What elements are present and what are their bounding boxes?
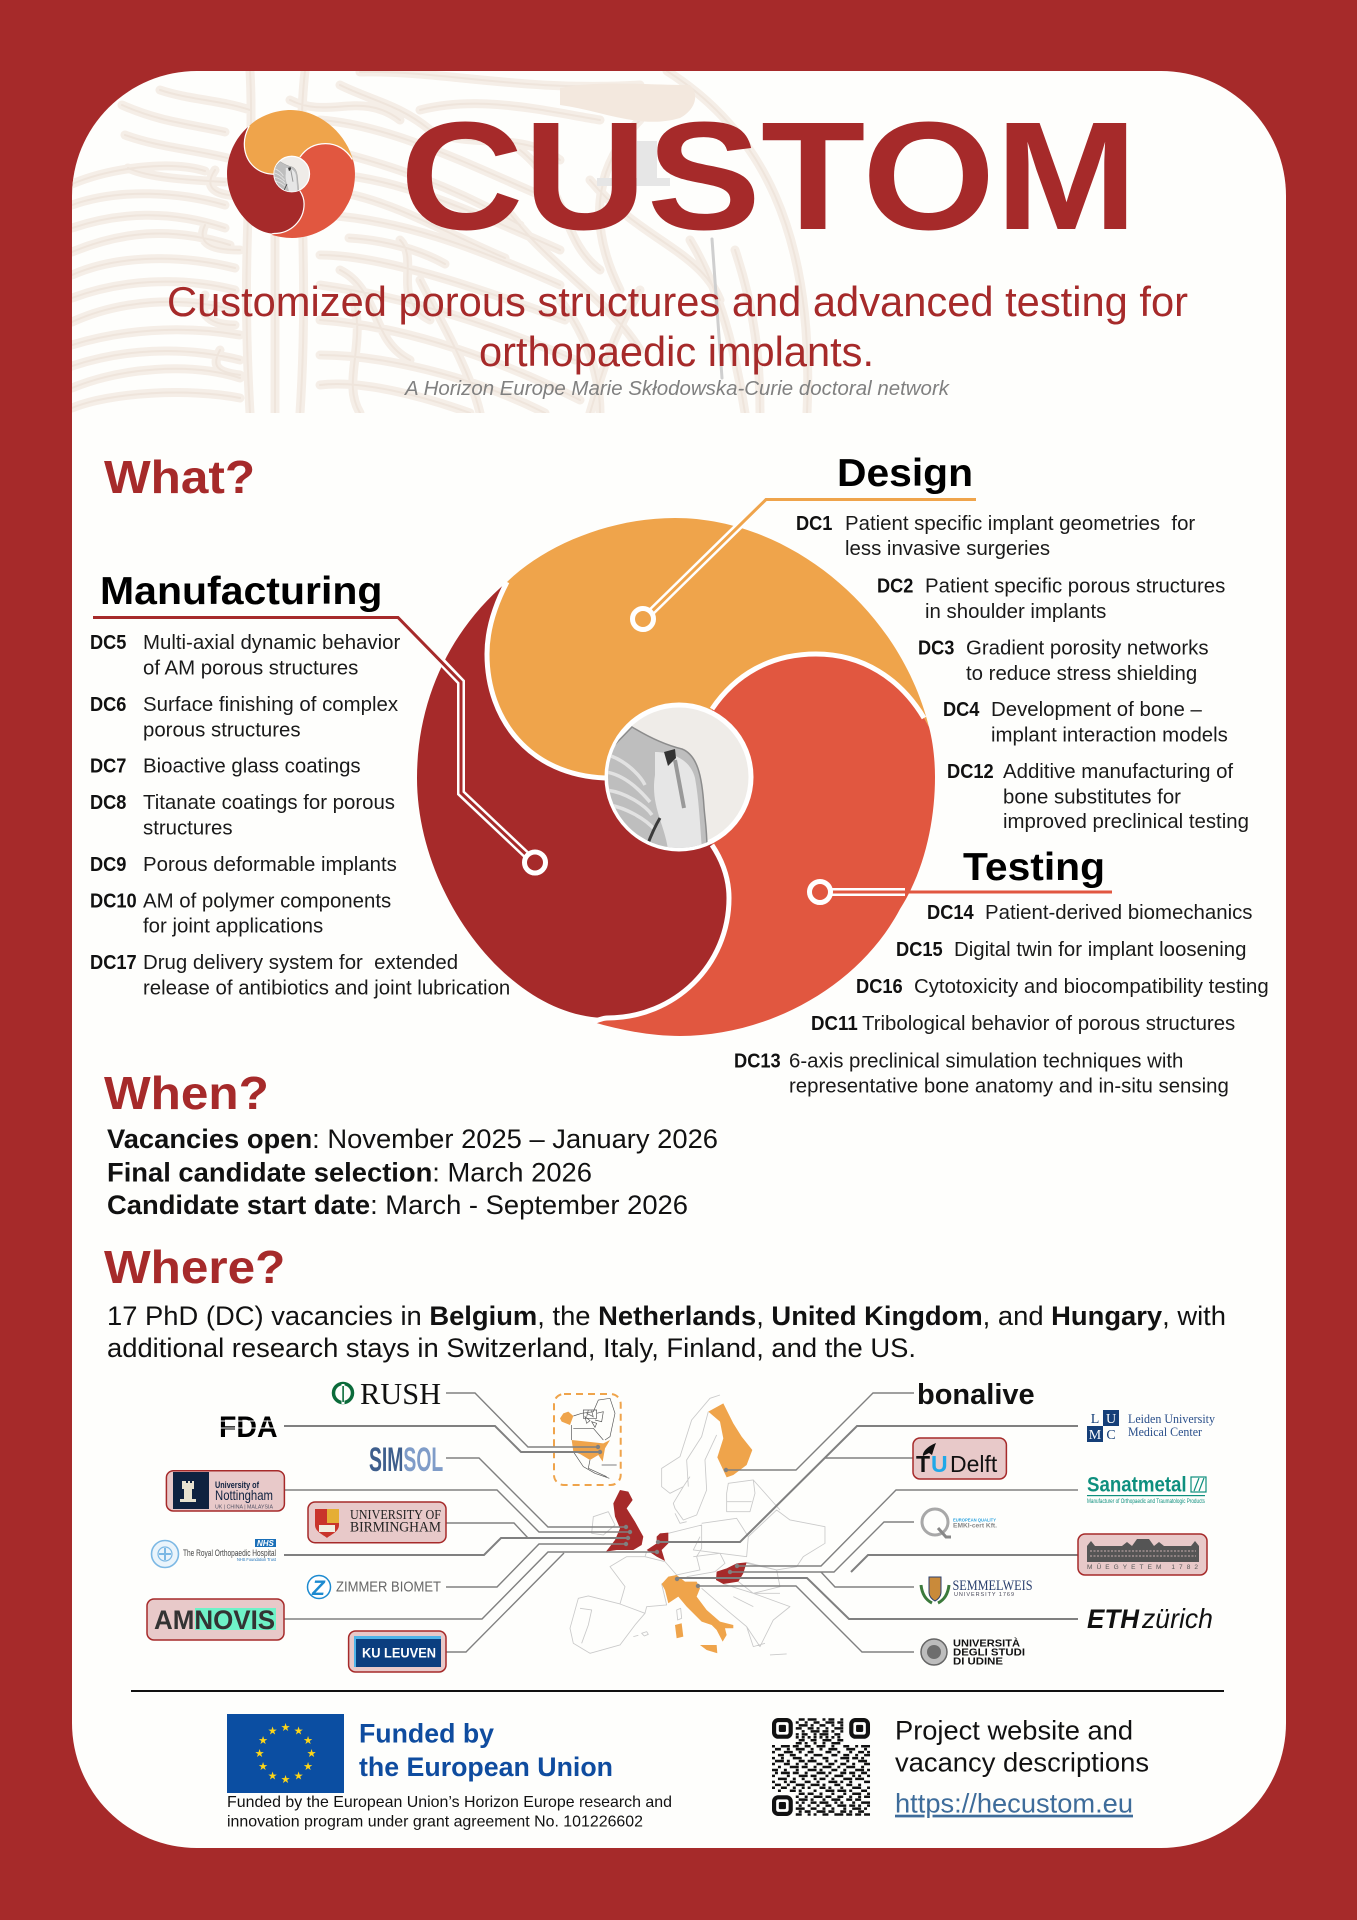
design list: DC2 — [877, 576, 913, 598]
subtitle: orthopaedic implants. — [479, 328, 874, 375]
europe outlines — [570, 1395, 825, 1655]
logo: Sanatmetal: Sanatmetal — [1087, 1474, 1187, 1497]
design list: in shoulder implants — [925, 601, 1106, 623]
callout line: design — [632, 500, 976, 630]
logo: TU Delft: Delft — [950, 1451, 998, 1477]
heading: Testing: Testing — [963, 846, 1105, 889]
manufacturing list: DC10 — [90, 890, 137, 912]
testing list: Cytotoxicity and biocompatibility testing — [914, 976, 1269, 998]
grant statement: innovation program under grant agreement No. 101226602 — [227, 1814, 643, 1831]
manufacturing list — [90, 632, 510, 1000]
logo: Zimmer Biomet: Z — [311, 1577, 326, 1600]
manufacturing list: DC5 — [90, 632, 126, 654]
logo: EMKI-cert — [922, 1509, 997, 1537]
logo: Muegyetem — [1078, 1534, 1207, 1575]
logo: Leiden University Medical Center: C — [1106, 1428, 1116, 1443]
logo: EMKI-cert: EUROPEAN QUALITY — [953, 1518, 996, 1523]
funded by EU text: the European Union — [359, 1752, 613, 1782]
background anatomy illustration — [72, 71, 808, 413]
logo: Sanatmetal — [1087, 1474, 1206, 1505]
testing list: Digital twin for implant loosening — [954, 939, 1246, 961]
logo: University of Udine: DEGLI STUDI — [953, 1648, 1025, 1659]
funded by EU text — [359, 1719, 613, 1782]
logo: University of Udine — [921, 1637, 1025, 1668]
manufacturing list: structures — [143, 818, 233, 840]
logo: KU Leuven — [349, 1631, 446, 1672]
leader lines — [284, 1393, 1078, 1652]
project website text: vacancy descriptions — [895, 1748, 1149, 1778]
subtitle: Customized porous structures and advanced testing for — [167, 278, 1188, 325]
testing list: DC13 — [734, 1050, 781, 1072]
map of partner countries — [560, 1395, 825, 1655]
manufacturing list: of AM porous structures — [143, 658, 358, 680]
design list: Gradient porosity networks — [966, 638, 1209, 660]
manufacturing list: DC8 — [90, 792, 126, 814]
logo: University of Birmingham: UNIVERSITY OF — [350, 1507, 441, 1522]
logo: ETH Zurich — [1087, 1603, 1213, 1634]
tagline: A Horizon Europe Marie Skłodowska-Curie doctoral network — [403, 377, 951, 400]
EU flag: ★ — [281, 1774, 291, 1786]
centre hub with shoulder image — [600, 705, 751, 850]
manufacturing list: Titanate coatings for porous — [143, 792, 395, 814]
logo: AM Novis — [147, 1599, 284, 1640]
highlighted countries — [560, 1403, 752, 1653]
logo: Royal Orthopaedic Hospital — [152, 1539, 277, 1568]
design list: Patient specific porous structures — [925, 576, 1225, 598]
logo: ETH Zurich: ETH — [1087, 1604, 1139, 1634]
manufacturing list: Bioactive glass coatings — [143, 756, 361, 778]
logo: Sanatmetal: Manufacturer of Orthopaedic and Traumatologic Products — [1087, 1499, 1205, 1505]
grant statement: Funded by the European Union’s Horizon Europe research and — [227, 1794, 672, 1811]
heading: Design: Design — [837, 452, 973, 495]
design list: Additive manufacturing of — [1003, 761, 1233, 783]
design list: improved preclinical testing — [1003, 811, 1249, 833]
logo: University of Birmingham — [308, 1502, 446, 1543]
manufacturing list: AM of polymer components — [143, 890, 391, 912]
design list: Development of bone – — [991, 699, 1203, 721]
logo: Leiden University Medical Center: Medical Center — [1128, 1425, 1203, 1439]
heading: Testing — [810, 846, 1112, 902]
design list — [796, 513, 1249, 833]
logo: Leiden University Medical Center: M — [1089, 1428, 1102, 1443]
logo: University of Birmingham: BIRMINGHAM — [350, 1520, 441, 1536]
logo: Zimmer Biomet: ZIMMER BIOMET — [336, 1580, 441, 1596]
logo: Royal Orthopaedic Hospital: NHS Foundation Trust — [237, 1557, 277, 1562]
when text: Final candidate selection: March 2026 — [107, 1158, 592, 1188]
EU flag: ★ — [268, 1726, 278, 1738]
manufacturing list: porous structures — [143, 719, 301, 741]
logo: TU Delft — [913, 1438, 1006, 1479]
design list: to reduce stress shielding — [966, 663, 1197, 685]
title: CUSTOM — [400, 91, 1138, 262]
when text: Vacancies open: November 2025 – January 2026 — [107, 1124, 718, 1154]
logo: University of Udine: UNIVERSITÀ — [953, 1637, 1020, 1650]
logo: Zimmer Biomet — [308, 1576, 441, 1600]
grant statement — [227, 1794, 672, 1831]
heading: Design — [632, 452, 976, 630]
logo: University of Nottingham: UK | CHINA | MALAYSIA — [215, 1505, 273, 1511]
heading: When?: When? — [104, 1069, 269, 1120]
segment: manufacturing — [417, 582, 729, 1018]
funded by EU text: Funded by — [359, 1719, 494, 1749]
testing list: 6-axis preclinical simulation techniques with — [789, 1050, 1183, 1072]
logo: Royal Orthopaedic Hospital: NHS — [257, 1539, 275, 1548]
EU flag: ★ — [303, 1761, 313, 1773]
project website text: Project website and — [895, 1715, 1133, 1745]
logo: University of Udine: DI UDINE — [953, 1656, 1003, 1668]
design list: DC3 — [918, 638, 954, 660]
north america outline — [572, 1398, 617, 1478]
EU flag: ★ — [281, 1722, 291, 1734]
logo: AM Novis: AMNOVIS — [154, 1605, 275, 1635]
logo: Semmelweis: UNIVERSITY 1769 — [954, 1592, 1014, 1598]
testing list: DC16 — [856, 976, 903, 998]
logo: Muegyetem: MŰEGYETEM 1782 — [1087, 1562, 1198, 1571]
logo: TU Delft: U — [931, 1451, 948, 1477]
testing list: Patient-derived biomechanics — [985, 902, 1252, 924]
logo: Royal Orthopaedic Hospital: The Royal Orthopaedic Hospital — [183, 1548, 276, 1559]
project website text — [895, 1715, 1149, 1819]
segment: design — [487, 518, 929, 778]
logo: ETH Zurich: zürich — [1141, 1603, 1213, 1634]
EU flag: ★ — [268, 1770, 278, 1782]
subtitle — [167, 278, 1188, 375]
logo: Leiden University Medical Center: U — [1106, 1412, 1116, 1427]
logo: SimSol: SIMSOL — [369, 1440, 443, 1478]
QR code — [772, 1719, 870, 1815]
design list: DC4 — [943, 699, 980, 721]
logo: Leiden University Medical Center — [1087, 1410, 1216, 1443]
logo: Rush: RUSH — [360, 1377, 441, 1411]
callout line: testing — [810, 882, 1112, 902]
manufacturing list: DC6 — [90, 694, 126, 716]
manufacturing list: Surface finishing of complex — [143, 694, 398, 716]
where text: 17 PhD (DC) vacancies in Belgium, the Netherlands, United Kingdom, and Hungary, with — [107, 1301, 1226, 1331]
logo: University of Nottingham: University of — [215, 1480, 260, 1491]
EU flag: ★ — [258, 1735, 268, 1747]
design list: DC12 — [947, 761, 994, 783]
logo: Semmelweis — [921, 1577, 1032, 1603]
manufacturing list: DC7 — [90, 756, 126, 778]
inset frame: north america — [554, 1394, 621, 1485]
EU flag: ★ — [294, 1726, 304, 1738]
testing list: DC11 — [811, 1013, 858, 1035]
design list: less invasive surgeries — [845, 538, 1050, 560]
design list: DC1 — [796, 513, 832, 535]
logo: Leiden University Medical Center: L — [1091, 1412, 1099, 1427]
heading: Manufacturing — [93, 570, 546, 873]
logo: spiral mark — [227, 110, 355, 238]
logo: University of Nottingham: Nottingham — [215, 1487, 273, 1503]
EU flag: ★ — [294, 1770, 304, 1782]
manufacturing list: Drug delivery system for extended — [143, 952, 458, 974]
testing list: Tribological behavior of porous structures — [862, 1013, 1235, 1035]
testing list — [734, 902, 1269, 1098]
spiral diagram — [417, 518, 935, 1036]
testing list: representative bone anatomy and in-situ sensing — [789, 1076, 1229, 1098]
where text: additional research stays in Switzerland, Italy, Finland, and the US. — [107, 1333, 916, 1363]
EU flag: ★ — [303, 1735, 313, 1747]
design list: bone substitutes for — [1003, 786, 1181, 808]
manufacturing list: DC9 — [90, 854, 126, 876]
when text — [107, 1124, 718, 1220]
manufacturing list: DC17 — [90, 952, 137, 974]
logo: KU Leuven: KU LEUVEN — [362, 1645, 436, 1661]
when text: Candidate start date: March - September 2026 — [107, 1190, 688, 1220]
logo: Leiden University Medical Center: Leiden University — [1128, 1412, 1216, 1426]
segment: testing — [593, 654, 935, 1036]
project website text: https://hecustom.eu — [895, 1789, 1133, 1819]
design list: implant interaction models — [991, 724, 1228, 746]
where text — [107, 1301, 1226, 1363]
EU flag: ★ — [255, 1748, 265, 1760]
testing list: DC15 — [896, 939, 943, 961]
manufacturing list: Porous deformable implants — [143, 854, 397, 876]
EU flag: ★ — [307, 1748, 317, 1760]
manufacturing list: release of antibiotics and joint lubrication — [143, 978, 510, 1000]
EU flag — [227, 1714, 344, 1793]
logo: FDA: FDA — [219, 1411, 278, 1444]
logo: TU Delft: T — [916, 1451, 930, 1477]
heading: Manufacturing: Manufacturing — [100, 570, 382, 613]
logo: bonalive: bonalive — [917, 1379, 1035, 1411]
manufacturing list: for joint applications — [143, 916, 323, 938]
testing list: DC14 — [927, 902, 974, 924]
design list: Patient specific implant geometries for — [845, 513, 1195, 535]
EU flag: ★ — [258, 1761, 268, 1773]
callout line: manufacturing — [93, 618, 546, 873]
logo: EMKI-cert: EMKI-cert Kft. — [953, 1523, 997, 1530]
logo: Semmelweis: SEMMELWEIS — [952, 1578, 1032, 1594]
logo: University of Nottingham — [166, 1471, 284, 1511]
heading: Where?: Where? — [104, 1243, 285, 1294]
manufacturing list: Multi-axial dynamic behavior — [143, 632, 400, 654]
heading: What?: What? — [104, 453, 255, 504]
